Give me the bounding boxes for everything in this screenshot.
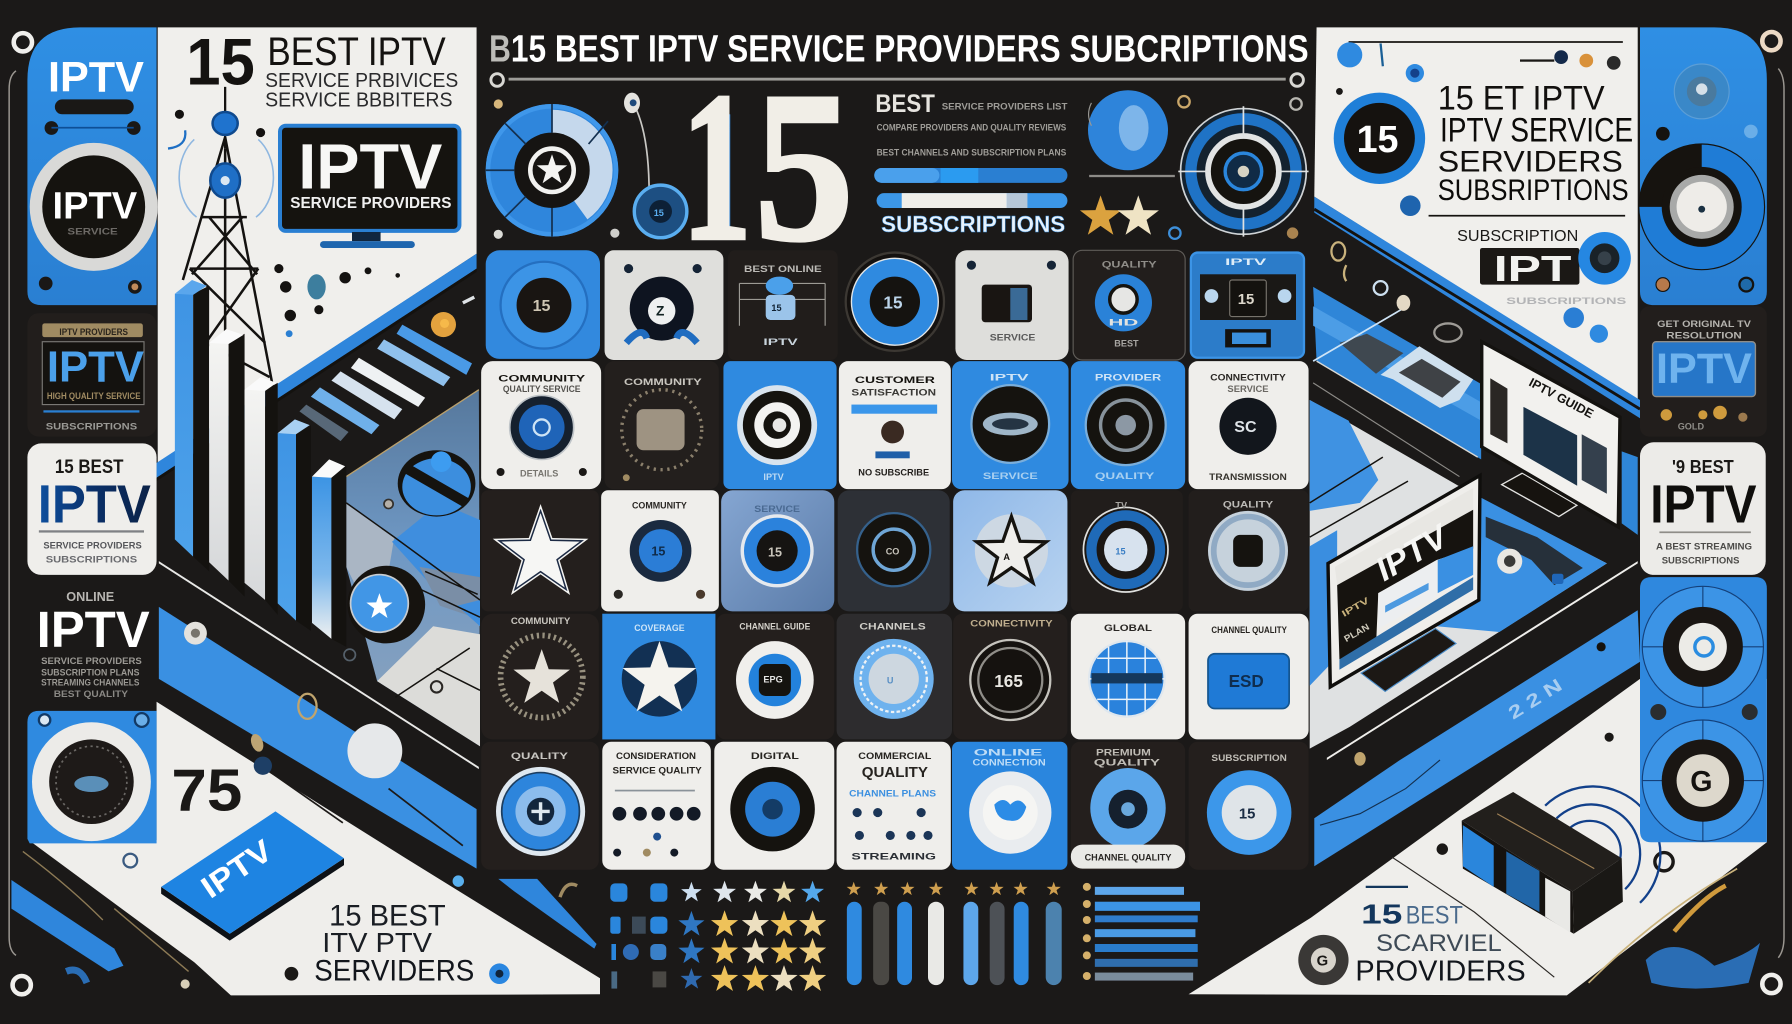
tile 4-4: CHANNELS (859, 622, 926, 632)
progress bars (874, 168, 1067, 208)
tile 2-7: TRANSMISSION (1209, 472, 1287, 482)
tile 2-1: COMMUNITY (498, 374, 585, 384)
panel: right middle perspective region (1310, 242, 1638, 749)
bar chart: rising 3d bars (175, 280, 346, 647)
icon: bottom right blue streak (1589, 869, 1760, 989)
tile 1-3 (728, 250, 838, 360)
heading: 15 best IPTV (186, 26, 458, 111)
tile 5-5 (952, 742, 1067, 870)
tile 3-5 (953, 490, 1067, 611)
tile 2-2: COMMUNITY (624, 377, 702, 387)
icon: IPTV blue tag: IPTV (195, 832, 279, 905)
text block: best subscriptions (874, 90, 1068, 237)
tile 3-1 star (481, 490, 599, 611)
tile 5-1: QUALITY (511, 751, 568, 761)
tile 1-1 (486, 250, 600, 359)
decorative dots (168, 110, 400, 337)
panel: left dark IPTV text block: BEST QUALITY (54, 689, 128, 699)
panel: right dark IPTV label: IPTV (1656, 345, 1752, 392)
tile 4-6 (1071, 614, 1185, 739)
text block: 15 best providers bottom left: 15 BEST (329, 900, 446, 933)
tile 1-7: IPTV (1225, 257, 1268, 267)
tile 4-4 (837, 614, 952, 739)
tile 3-4: CO (886, 546, 899, 556)
heading: 15 best IPTV: SERVICE PRBIVICES (265, 69, 458, 92)
tile 5-2: CONSIDERATION (616, 751, 696, 761)
bar 2 (209, 329, 245, 597)
tile 1-4: 15 (883, 293, 903, 313)
lower white and blue surfaces (1310, 400, 1638, 749)
icon: bottom right speaker badge (1298, 935, 1349, 985)
big number 15 (681, 49, 854, 286)
tile 5-7: SUBSCRIPTION (1211, 753, 1287, 763)
panel: left dark IPTV text block: SUBSCRIPTION PLANS (41, 667, 139, 677)
heading: 15 best IPTV: SERVICE BBBITERS (265, 88, 453, 111)
horizontal bars (1083, 883, 1200, 981)
tile 1-6: BEST (1114, 338, 1139, 348)
text and badge: subscription IPT: IPT (1494, 248, 1571, 289)
text block: best subscriptions: SERVICE PROVIDERS LIST (942, 102, 1068, 112)
icon: lower right monitor: IPTV (1340, 595, 1372, 619)
dark band icons (1313, 242, 1462, 477)
tile 1-2 (605, 250, 723, 360)
icon: set-top box with signal arcs (1462, 786, 1660, 934)
text block: bottom right providers: PROVIDERS (1355, 956, 1526, 988)
title divider (491, 74, 1303, 86)
panel: left dark IPTV label: IPTV (47, 344, 144, 392)
text and badge: subscription IPT: SUBSCRIPTION (1457, 228, 1578, 245)
tile 5-6: PREMIUM (1096, 747, 1151, 757)
heading: 15 best IPTV: 15 (186, 26, 255, 100)
tile 2-7: SERVICE (1227, 384, 1269, 394)
icon: pin and small ring dial (494, 93, 687, 239)
panel: right white 19 best IPTV card: IPTV (1650, 474, 1757, 534)
icon: IPTV monitor (280, 126, 459, 248)
icon: lower right monitor: IPTV (1370, 517, 1457, 589)
tile 2-3: IPTV (763, 472, 785, 482)
text block: bottom right providers (1355, 898, 1526, 988)
thin white diagonal line (159, 561, 479, 769)
tile 5-7 (1189, 742, 1309, 870)
tile 2-5: SERVICE (983, 471, 1038, 481)
tile 5-4 (837, 742, 951, 870)
bottom strip: icon and star ratings (498, 879, 1200, 991)
panel: left blue panel with IPTV badge: IPTV (48, 53, 144, 100)
tile 5-6 (1071, 742, 1185, 870)
tile grid: row 4 (481, 614, 1309, 739)
tile 4-2: COVERAGE (634, 623, 685, 633)
panel: left dark IPTV label: HIGH QUALITY SERVICE (47, 391, 141, 401)
tile 3-6 (1071, 490, 1183, 611)
text and badge: subscription IPT (1457, 228, 1631, 306)
dark lower corner streak (11, 851, 190, 989)
text block: right heading: SERVIDERS (1438, 145, 1623, 178)
panel: right white 19 best IPTV card (1640, 442, 1766, 575)
blue diagonal band (1314, 610, 1640, 866)
panel: left dark IPTV label: SUBSCRIPTIONS (46, 422, 137, 432)
panel: left white 15 best IPTV card: SUBSCRIPTIONS (46, 554, 137, 564)
bar 5 (312, 459, 346, 647)
chart: left segmented dial (486, 104, 618, 237)
tile 3-7: QUALITY (1223, 499, 1273, 509)
panel: lower right white area (1189, 561, 1767, 995)
text block: bottom right providers: SCARVIEL (1376, 930, 1502, 957)
panel: left white 15 best IPTV card: 15 BEST (55, 456, 124, 478)
tile 2-1: QUALITY SERVICE (503, 384, 581, 394)
tile 5-4: STREAMING (851, 851, 936, 861)
panel: left white 15 best IPTV card: IPTV (38, 474, 151, 534)
star matrix (678, 881, 826, 991)
tile 1-1: 15 (533, 298, 550, 315)
tile 2-4 (839, 361, 951, 489)
tile 5-4: CHANNEL PLANS (849, 789, 936, 799)
tile 4-7 (1189, 614, 1309, 739)
heading: 15 best IPTV: BEST IPTV (267, 30, 446, 74)
tile 2-6: QUALITY (1095, 471, 1154, 481)
tile grid: row 1 (486, 250, 1304, 360)
icon: 15 badge (1334, 93, 1425, 184)
panel: left dark IPTV label: IPTV PROVIDERS (59, 327, 128, 337)
tile 2-2 (605, 361, 719, 489)
tile 4-3: EPG (763, 674, 783, 684)
icon: lower right monitor: PLAN (1342, 622, 1371, 644)
tile 5-1 (481, 742, 599, 870)
tile 3-3: 15 (768, 546, 782, 560)
decorative dots and lines (1336, 41, 1623, 343)
tile 5-7: 15 (1239, 806, 1255, 822)
text block: 15 best providers bottom left: SERVIDERS (314, 955, 474, 988)
tile 2-4: SATISFACTION (851, 387, 936, 397)
tile 2-4: NO SUBSCRIBE (858, 467, 929, 477)
big number 15: 5 (754, 49, 854, 286)
tile 3-3 (721, 490, 834, 611)
small blue icons (610, 883, 667, 989)
tile 2-6 (1071, 361, 1185, 489)
panel: left blue panel with IPTV badge: IPTV (53, 184, 137, 226)
tile 2-4: CUSTOMER (855, 375, 935, 385)
tile 1-3: 15 (771, 303, 782, 313)
icon: broadcast tower (179, 87, 274, 446)
text block: best subscriptions: COMPARE PROVIDERS AND QUALITY REVIEWS (877, 122, 1066, 132)
upper blue strip with inserts (1313, 287, 1481, 459)
panel: left dark IPTV text block: STREAMING CHANNELS (41, 678, 139, 688)
panel: right dark IPTV label (1640, 306, 1767, 437)
panel: left dark IPTV text block: ONLINE (66, 590, 114, 604)
panel: right dark IPTV label: GET ORIGINAL TV (1657, 319, 1752, 329)
inset perspective panel (346, 390, 480, 746)
panel: right white 19 best IPTV card: A BEST STREAMING (1656, 542, 1752, 552)
panel: left blue panel with IPTV badge (27, 27, 158, 305)
tile 5-5: CONNECTION (973, 758, 1046, 768)
panel: right double speaker panel: G (1690, 766, 1713, 798)
tile 4-5: CONNECTIVITY (970, 618, 1053, 628)
tile 3-2: 15 (651, 544, 665, 558)
bar 1 (175, 280, 209, 571)
tile 2-5 (952, 361, 1069, 489)
tile 3-7 (1189, 490, 1309, 611)
panel: left white 15 best IPTV card (27, 443, 157, 575)
tile 3-2: COMMUNITY (632, 501, 687, 511)
tile 4-3: CHANNEL GUIDE (739, 622, 810, 632)
panel: right dark IPTV label: GOLD (1678, 422, 1704, 432)
lower white panel (29, 702, 600, 995)
tile 5-3: DIGITAL (751, 751, 799, 761)
text block: 15 best providers bottom left (285, 900, 510, 988)
text block: right heading (1429, 80, 1633, 217)
tile 1-7 (1191, 253, 1304, 358)
blue diagonal band (159, 607, 477, 869)
text block: best subscriptions: BEST (875, 90, 935, 118)
text block: best subscriptions: BEST CHANNELS AND SUBSCRIPTION PLANS (877, 147, 1066, 157)
rating stars (1080, 195, 1159, 235)
tile 4-7: CHANNEL QUALITY (1211, 625, 1287, 635)
tile 3-5: A (1003, 552, 1010, 562)
text block: 15 best providers bottom left: ITV PTV (322, 927, 433, 958)
bar 4 (278, 419, 311, 631)
tile 2-3 (723, 361, 837, 489)
text block: bottom right providers: BEST (1406, 901, 1463, 929)
text block: bottom right providers: 15 (1361, 898, 1402, 929)
tile 2-1: DETAILS (520, 469, 558, 479)
tile 5-4: QUALITY (862, 765, 928, 781)
label: 75: 75 (171, 756, 242, 823)
tile grid: row 2 (481, 361, 1309, 489)
icon: slats and indicator (299, 297, 474, 441)
tile 2-7: CONNECTIVITY (1210, 373, 1286, 383)
text block: right heading: 15 ET IPTV (1438, 80, 1605, 118)
tile 5-6: CHANNEL QUALITY (1085, 853, 1171, 863)
tile 3-4 (838, 490, 950, 611)
icon: 15 badge: 15 (1357, 118, 1399, 160)
tile 4-2 (602, 614, 715, 739)
tile 1-5 (955, 250, 1069, 360)
tile 1-6: HD (1109, 318, 1139, 328)
big number 15: 1 (681, 49, 752, 286)
panel: right top blue speaker panel (1639, 27, 1767, 305)
text and badge: subscription IPT: SUBSCRIPTIONS (1506, 296, 1626, 306)
band buttons (184, 622, 464, 887)
panel: left dark IPTV text block: SERVICE PROVIDERS (41, 656, 142, 666)
tile 5-6: QUALITY (1094, 758, 1160, 768)
title: B (489, 28, 511, 70)
tile 5-2: SERVICE QUALITY (613, 766, 702, 776)
icon: IPTV monitor: SERVICE PROVIDERS (290, 195, 452, 212)
tile 2-6: PROVIDER (1095, 373, 1162, 383)
text block: best subscriptions: SUBSCRIPTIONS (881, 211, 1065, 237)
icon: upper right monitor: IPTV GUIDE (1527, 375, 1596, 421)
tile 1-3: IPTV (763, 337, 799, 347)
tile 4-4: U (887, 675, 894, 685)
tile 4-5 (953, 614, 1067, 739)
tile grid: row 5 (481, 742, 1309, 870)
tile 1-7: 15 (1238, 292, 1254, 308)
tile 3-3: SERVICE (754, 504, 800, 514)
text block: right heading: IPTV SERVICE (1440, 112, 1633, 150)
star button (344, 566, 425, 661)
icon: IPTV monitor: IPTV (298, 131, 443, 203)
tile 3-6: 15 (1115, 546, 1126, 556)
title: 15 BEST IPTV SERVICE PROVIDERS SUBCRIPTIONS (511, 28, 1309, 70)
icon: pin and small ring dial: 15 (654, 208, 664, 218)
panel: left dark IPTV label (27, 313, 157, 437)
icon: lower right monitor (1328, 475, 1480, 691)
panel: right white 19 best IPTV card: '9 BEST (1672, 456, 1734, 477)
decorative marks (1354, 733, 1673, 977)
vertical bars (847, 882, 1062, 985)
panel: right dark IPTV label: RESOLUTION (1666, 330, 1742, 340)
panel: right double speaker panel (1640, 577, 1767, 842)
blue diagonal band: 2 2 N (1504, 674, 1566, 723)
bar 3 (245, 377, 278, 615)
tile 4-6: GLOBAL (1104, 623, 1153, 633)
tile grid: row 3 (481, 490, 1309, 611)
tile 5-2 (602, 742, 711, 870)
tile 1-4 (846, 253, 944, 351)
thin white diagonal line (1327, 561, 1638, 760)
chart region: lower left dark, blue and white panels (11, 390, 600, 995)
tile 2-1 (481, 361, 601, 489)
tile 5-4: COMMERCIAL (858, 751, 932, 761)
tile 2-7 (1189, 361, 1309, 489)
icon: IPTV blue tag (161, 811, 344, 941)
tile 1-6 (1073, 250, 1185, 360)
tile 5-5: ONLINE (974, 747, 1042, 757)
tile 1-5: SERVICE (990, 333, 1035, 343)
tile 4-7: ESD (1229, 671, 1264, 691)
tile 1-2: Z (656, 303, 664, 318)
panel: top left white panel (157, 26, 477, 481)
diagonal corner accents (498, 879, 597, 949)
panel: right white panel (1314, 27, 1640, 418)
panel: left white 15 best IPTV card: SERVICE PROVIDERS (43, 541, 142, 551)
icon: upper right monitor (1482, 342, 1620, 527)
tile 4-3 (717, 614, 834, 739)
panel: left blue panel with IPTV badge: SERVICE (67, 226, 118, 236)
tile 4-1: COMMUNITY (511, 616, 570, 626)
tile 3-2 (601, 490, 719, 611)
tile 4-5: 165 (994, 671, 1023, 691)
tile 3-6: TV (1115, 501, 1128, 511)
tile 1-6: QUALITY (1102, 259, 1157, 269)
tile 2-5: IPTV (990, 373, 1030, 383)
tile 5-3 (714, 742, 834, 870)
tile 4-1 (481, 614, 599, 739)
panel: right white 19 best IPTV card: SUBSCRIPTIONS (1662, 555, 1739, 565)
tile 2-7: SC (1234, 419, 1257, 436)
panel: left dark IPTV text block: IPTV (37, 600, 150, 658)
panel: left dark IPTV text block (37, 590, 150, 699)
icon: blue sphere (1088, 90, 1175, 177)
chart: right target dial (1169, 96, 1309, 239)
panel: left speaker panel (27, 711, 157, 867)
icon: bottom right speaker badge: G (1317, 954, 1328, 970)
text block: right heading: SUBSRIPTIONS (1438, 174, 1629, 207)
tile 1-3: BEST ONLINE (744, 264, 822, 274)
